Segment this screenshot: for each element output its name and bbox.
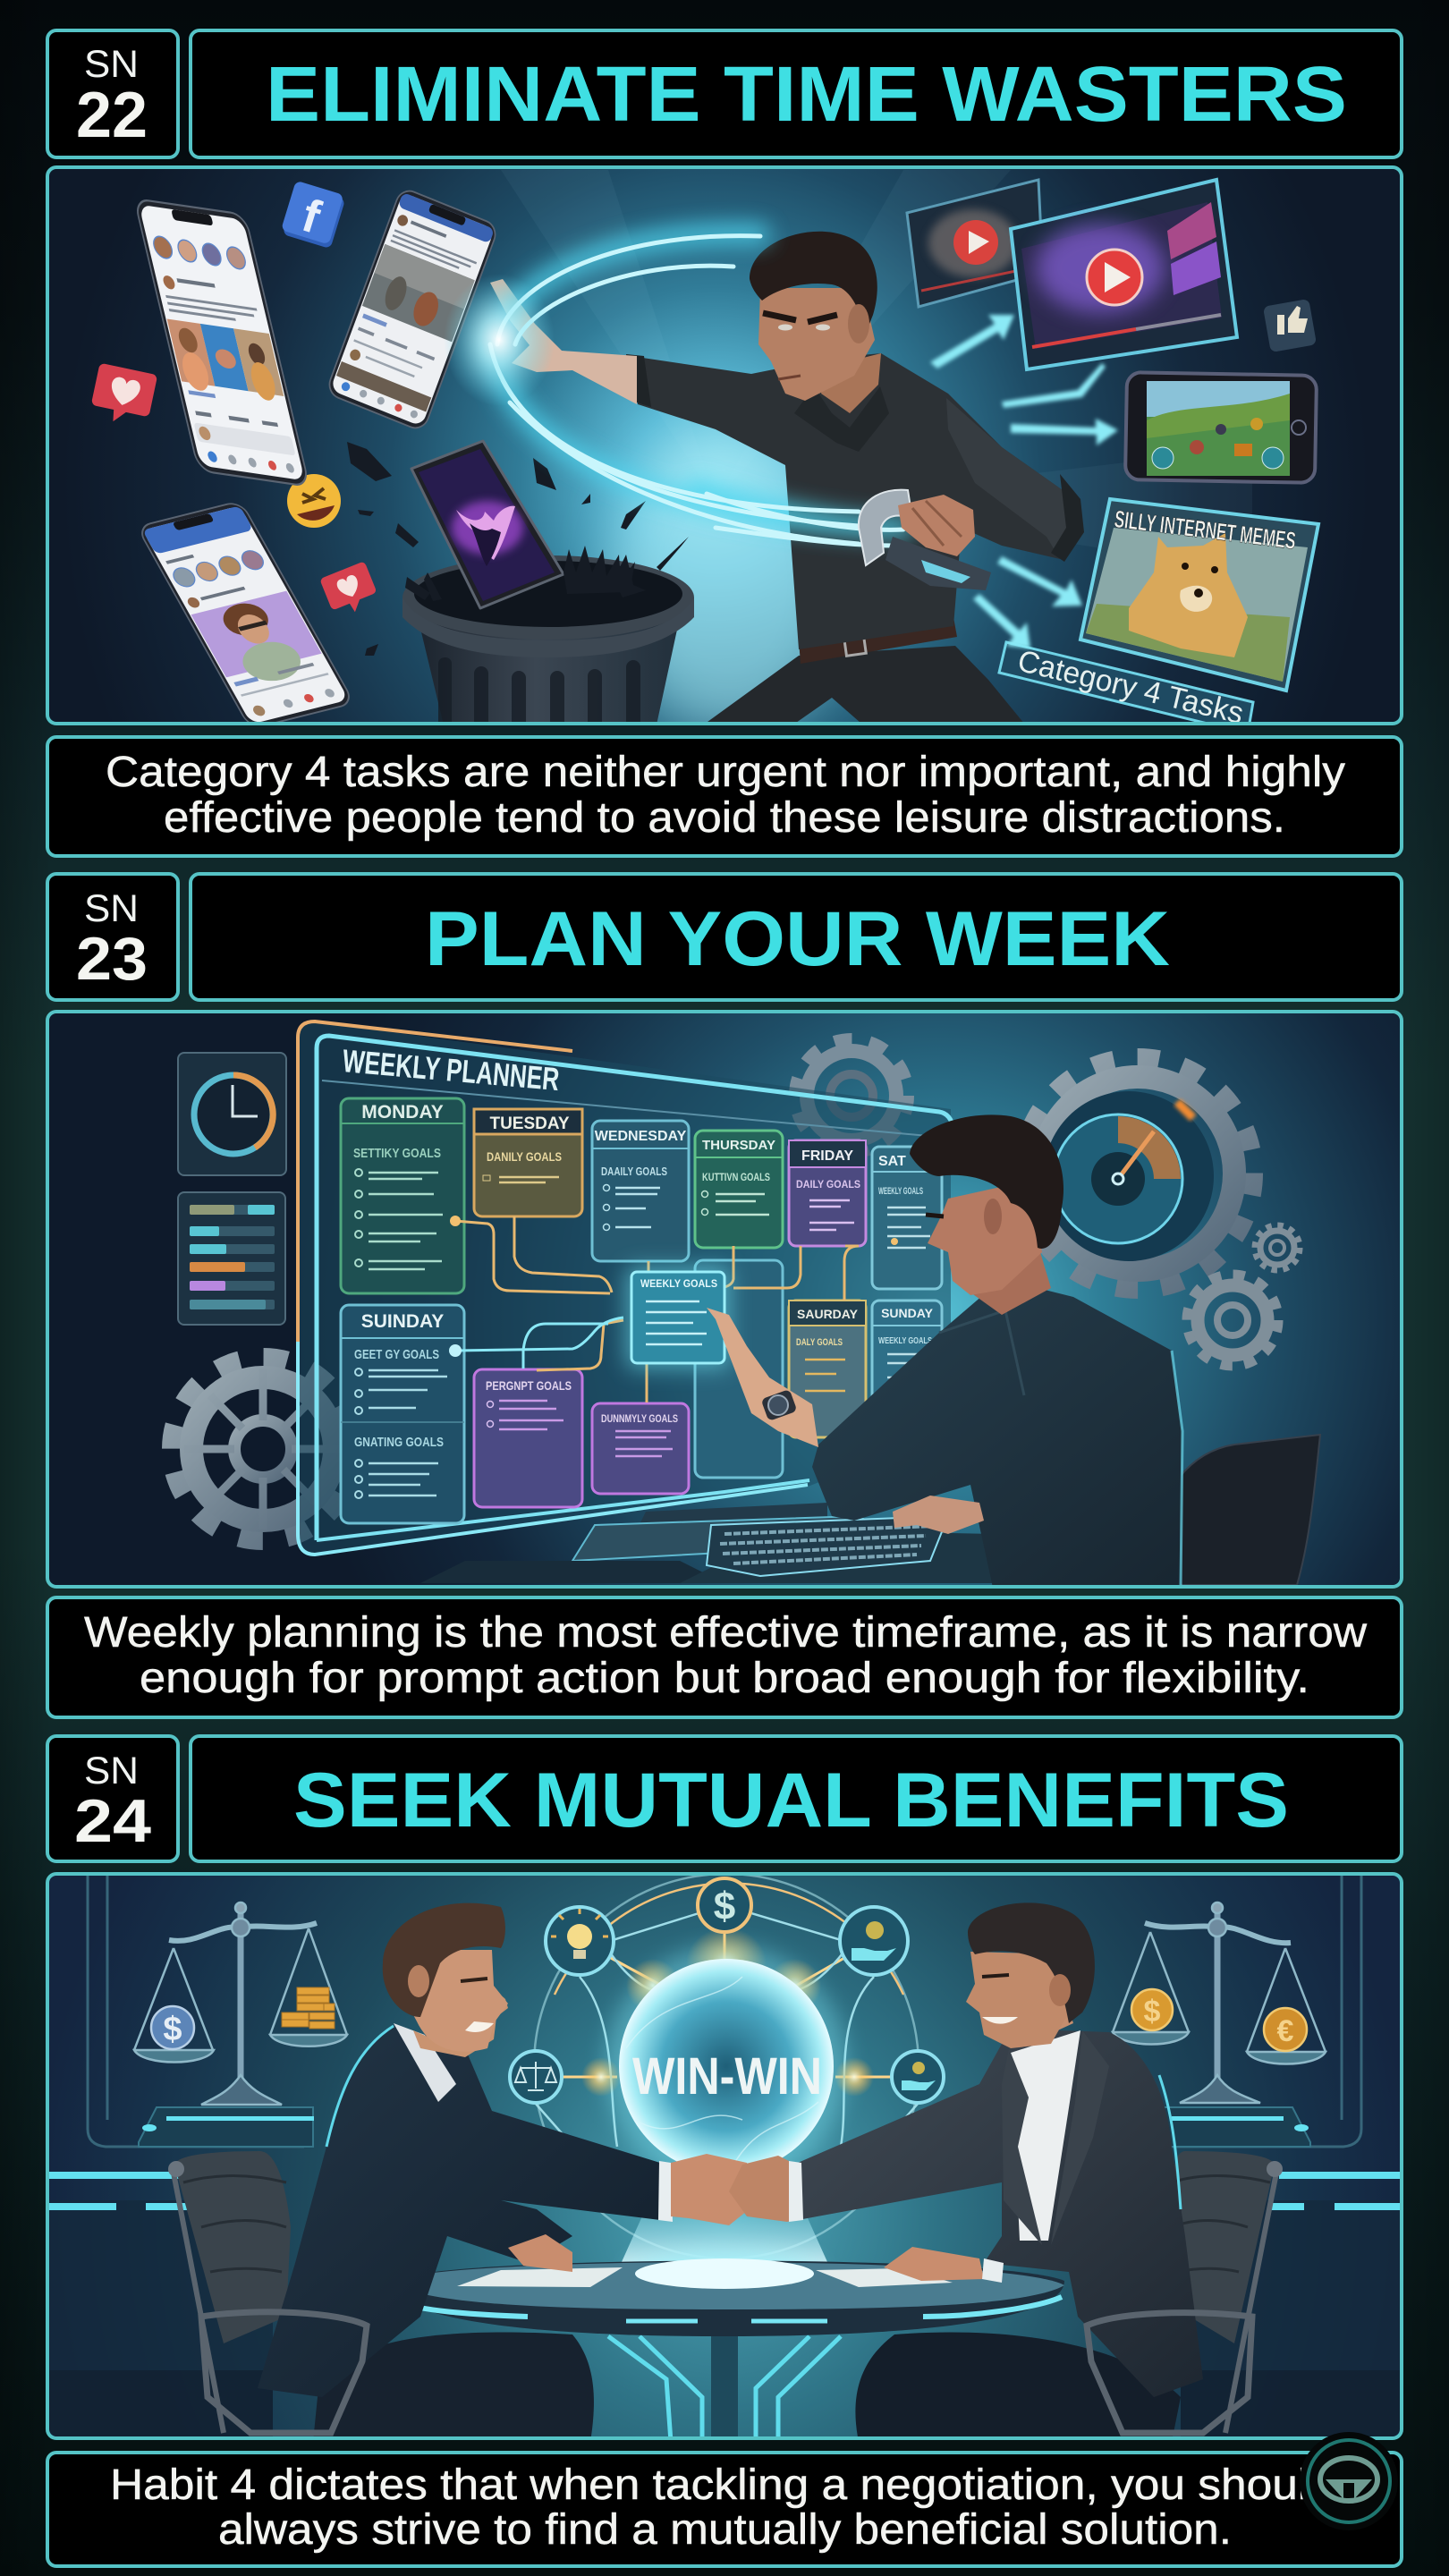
caption: weekly planning: Weekly planning is the most effective timeframe, as it is narrow bbox=[84, 1609, 1367, 1657]
card: sunday left: GEET GY GOALS bbox=[354, 1347, 439, 1362]
section 24 number badge bbox=[47, 1736, 178, 1861]
panel: eliminate time wasters illustration bbox=[47, 167, 1402, 733]
icon: wrench tool held in hand bbox=[859, 490, 991, 590]
card: saturday bbox=[872, 1147, 942, 1289]
icon: left balance scale bbox=[134, 1902, 347, 2105]
icon: mobile game phone bbox=[1125, 372, 1317, 483]
card: monday: MONDAY bbox=[361, 1102, 444, 1123]
icon: clock widget bbox=[178, 1053, 286, 1175]
card: wednesday bbox=[592, 1121, 689, 1261]
card: purple prompt goals bbox=[474, 1369, 582, 1507]
card: sunday right bbox=[872, 1301, 942, 1431]
logo: circular watermark bbox=[1300, 2432, 1398, 2530]
figure: left businessman bbox=[201, 1903, 760, 2442]
card: thursday: KUTTIVN GOALS bbox=[702, 1171, 770, 1183]
panel: plan your week illustration bbox=[47, 1012, 1402, 1588]
swirl: energy sweep of light bbox=[490, 233, 903, 546]
screen: holographic weekly planner bbox=[298, 1021, 953, 1555]
card: wednesday: WEDNESDAY bbox=[595, 1129, 687, 1144]
card: saurday: SAURDAY bbox=[797, 1307, 859, 1321]
icon: heart bubble large bbox=[91, 363, 157, 421]
card: monday: SETTIKY GOALS bbox=[353, 1146, 441, 1161]
debris: shards bursting from trash bbox=[347, 442, 689, 656]
icon: chair right bbox=[1172, 2151, 1283, 2433]
icon: heart bubble small bbox=[320, 562, 376, 612]
card: friday: DAILY GOALS bbox=[796, 1178, 860, 1191]
shelf right with neon bbox=[1163, 2107, 1310, 2147]
phone: purple game screen falling into trash bbox=[411, 441, 564, 608]
caption: weekly planning: enough for prompt action but broad enough for flexibility. bbox=[140, 1655, 1309, 1702]
card: friday bbox=[789, 1140, 866, 1246]
title: seek mutual benefits bbox=[191, 1736, 1402, 1861]
section 22 number badge: SN bbox=[84, 43, 139, 86]
icon: silly internet memes card: SILLY INTERNET MEMES bbox=[1113, 505, 1297, 555]
card: tuesday: TUESDAY bbox=[489, 1114, 570, 1133]
title: eliminate time wasters bbox=[191, 30, 1402, 157]
figure: man at planner bbox=[707, 1114, 1182, 1588]
section 23 number badge: SN bbox=[84, 887, 139, 930]
caption: habit 4: always strive to find a mutually beneficial solution. bbox=[218, 2506, 1232, 2554]
icon: thumbs up bubble bbox=[1263, 299, 1317, 352]
phone: facebook feed bottom-left bbox=[137, 501, 354, 729]
icon: giving hand node top-right bbox=[840, 1907, 908, 1975]
orb: win-win globe: WIN-WIN bbox=[632, 2047, 822, 2106]
caption: category 4 tasks bbox=[47, 737, 1402, 856]
figure: right businessman bbox=[729, 1902, 1252, 2442]
card: tuesday: DANILY GOALS bbox=[487, 1149, 562, 1164]
card: wednesday: DAAILY GOALS bbox=[601, 1165, 667, 1178]
network: arcs linking icons around the orb bbox=[534, 1874, 919, 2258]
icon: right balance scale: € bbox=[1277, 2014, 1294, 2048]
card: sunday right: SUNDAY bbox=[881, 1306, 934, 1320]
icon: facebook badge bbox=[283, 182, 343, 247]
section 22 number badge: 22 bbox=[76, 80, 148, 151]
icon: chair left bbox=[168, 2151, 291, 2433]
card: saturday: WEEKLY GOALS bbox=[878, 1186, 923, 1197]
title: eliminate time wasters: ELIMINATE TIME WASTERS bbox=[266, 51, 1347, 138]
card: purple dunnmyly goals bbox=[592, 1403, 689, 1494]
section 23 number badge: 23 bbox=[76, 925, 148, 993]
card: friday: FRIDAY bbox=[801, 1148, 853, 1164]
label: category 4 tasks: Category 4 Tasks bbox=[1014, 644, 1247, 731]
shelf left with neon bbox=[139, 2107, 314, 2147]
icon: office chair bbox=[1140, 1435, 1320, 1585]
connectors: goal flow lines bbox=[449, 1216, 898, 1402]
icon: gear bottom left bbox=[174, 1360, 352, 1538]
caption: category 4 tasks: effective people tend to avoid these leisure distractions. bbox=[164, 794, 1285, 842]
card: thursday bbox=[695, 1131, 783, 1248]
caption: weekly planning bbox=[47, 1597, 1402, 1717]
title: plan your week bbox=[191, 874, 1402, 1000]
icon: right balance scale: $ bbox=[1144, 1995, 1161, 2029]
icon: dollar node: $ bbox=[714, 1885, 735, 1928]
caption: category 4 tasks: Category 4 tasks are neither urgent nor important, and highly bbox=[106, 749, 1345, 796]
icon: gear top behind screen bbox=[796, 1040, 907, 1151]
card: saturday: SAT bbox=[878, 1154, 906, 1169]
icon: laughing emoji bbox=[287, 474, 341, 528]
section 24 number badge: 24 bbox=[74, 1787, 151, 1855]
card: weekly goals highlight: WEEKLY GOALS bbox=[640, 1277, 717, 1290]
phone: facebook feed top-left bbox=[134, 199, 309, 487]
card: saurday bbox=[789, 1301, 866, 1437]
card: weekly goals highlight bbox=[626, 1267, 730, 1368]
card: sunday right: WEEKLY GOALS bbox=[878, 1336, 932, 1346]
neon wall strips bbox=[49, 2172, 1400, 2210]
icon: large video window bbox=[1011, 180, 1237, 369]
card: sunday left bbox=[341, 1305, 464, 1523]
title: seek mutual benefits: SEEK MUTUAL BENEFITS bbox=[293, 1758, 1289, 1843]
icon: small video window bbox=[907, 180, 1043, 307]
section 24 number badge: SN bbox=[84, 1750, 139, 1792]
icon: trash can bbox=[402, 555, 694, 733]
orb: win-win globe bbox=[606, 1945, 847, 2187]
icon: large gear with gauge bbox=[1021, 1057, 1254, 1290]
desk and monitor stand bbox=[420, 1503, 1011, 1583]
card: thursday: THURSDAY bbox=[702, 1138, 775, 1153]
icon: dollar node bbox=[698, 1878, 751, 1932]
phone: facebook feed top-centre bbox=[326, 187, 499, 432]
front rim of trash can bbox=[402, 597, 694, 657]
caption: habit 4: Habit 4 dictates that when tackling a negotiation, you should bbox=[110, 2462, 1334, 2509]
table: round meeting table bbox=[390, 2258, 1064, 2442]
icon: left balance scale: $ bbox=[163, 2011, 182, 2048]
screen: holographic weekly planner: WEEKLY PLANNER bbox=[341, 1042, 561, 1097]
card: saurday: DALY GOALS bbox=[796, 1337, 843, 1348]
icon: justice scales node bbox=[510, 2051, 562, 2103]
title: plan your week: PLAN YOUR WEEK bbox=[425, 896, 1170, 982]
panel: seek mutual benefits illustration bbox=[47, 1874, 1402, 2442]
glow: network nodes bbox=[581, 1928, 874, 2097]
section 22 number badge bbox=[47, 30, 178, 157]
icon: giving hand node bottom-right bbox=[892, 2051, 944, 2103]
icon: silly internet memes card bbox=[1080, 499, 1318, 691]
card: tuesday bbox=[474, 1109, 582, 1216]
arrows: distractions flung outward bbox=[930, 315, 1118, 648]
glow: light beam rising from table bbox=[617, 2182, 832, 2293]
section 23 number badge bbox=[47, 874, 178, 1000]
card: purple dunnmyly goals: DUNNMYLY GOALS bbox=[601, 1412, 678, 1425]
card: sunday left: GNATING GOALS bbox=[354, 1435, 444, 1450]
icon: right balance scale bbox=[1113, 1902, 1326, 2103]
icon: lightbulb node bbox=[546, 1907, 614, 1975]
figure: man swiping away distractions bbox=[490, 232, 1084, 729]
icon: small gears right bbox=[1188, 1225, 1300, 1365]
card: monday bbox=[341, 1098, 464, 1293]
card: sunday left: SUINDAY bbox=[361, 1311, 444, 1332]
card: purple prompt goals: PERGNPT GOALS bbox=[486, 1378, 572, 1393]
chart: progress bars widget bbox=[178, 1192, 285, 1325]
glow: flare at open hand bbox=[444, 274, 555, 406]
icon: keyboard bbox=[707, 1516, 948, 1576]
caption: habit 4 bbox=[47, 2453, 1402, 2566]
card: lower blue card bbox=[695, 1260, 783, 1478]
icon: facebook badge: f bbox=[296, 190, 326, 244]
